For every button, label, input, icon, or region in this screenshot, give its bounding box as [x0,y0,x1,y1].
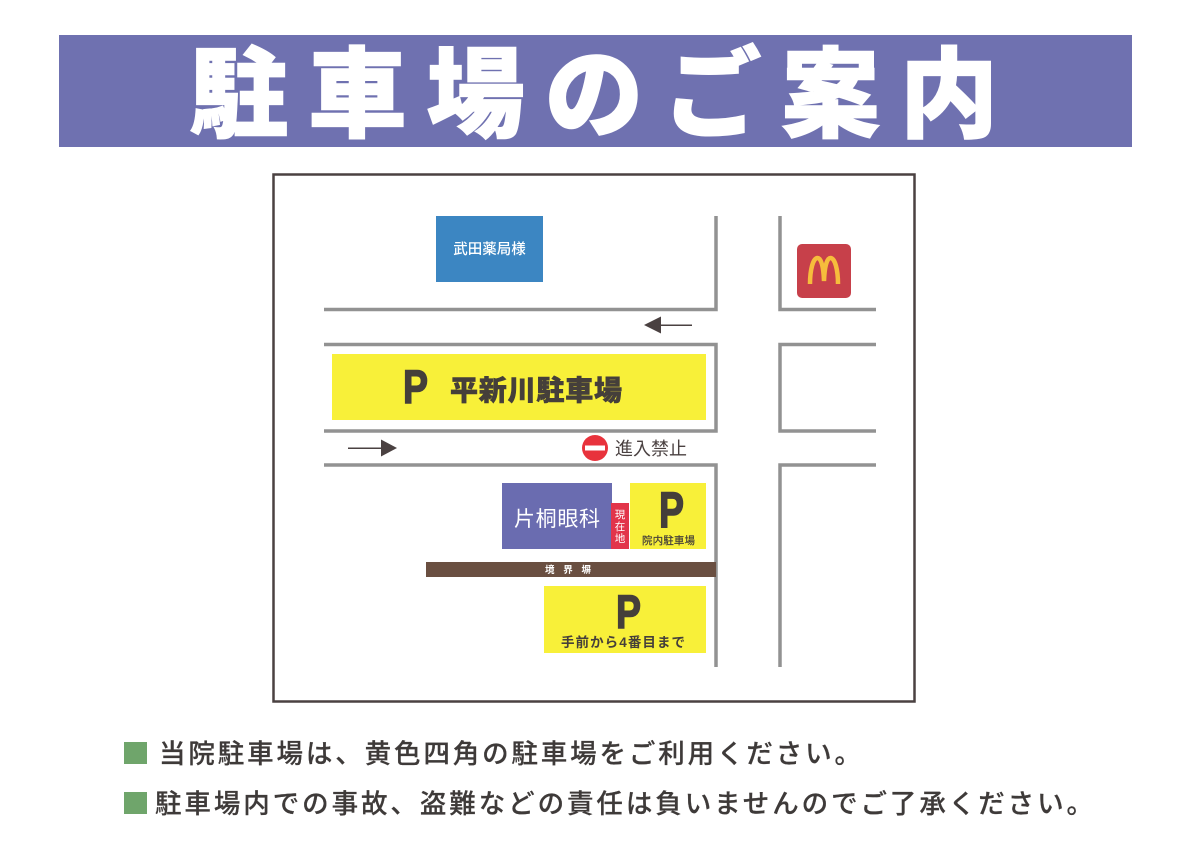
no entry label: 進入禁止 [615,439,687,459]
parking: clinic lot [630,482,706,549]
parking: front four spaces [544,585,706,653]
current location marker: 在 [615,521,625,533]
title banner: 駐車場のご案内 [190,40,998,150]
clinic building: 片桐眼科 [514,508,600,531]
parking: Heishinkawa: 平新川駐車場 [450,375,622,406]
pharmacy building: 武田薬局様 [453,241,526,258]
parking: front four spaces: P [616,585,641,638]
current location marker: 地 [615,532,626,545]
arrow: westbound [644,316,692,334]
icon: McDonald's logo [797,244,851,298]
note 2: 駐車場内での事故、盗難などの責任は負いませんのでご了承ください。 [155,789,1093,819]
roads [324,216,876,667]
arrow: eastbound [348,440,397,456]
boundary fence: 境界塀 [545,564,591,576]
boundary fence [426,562,716,577]
clinic building [502,483,612,549]
parking: clinic lot: 院内駐車場 [642,534,696,547]
current location marker [611,503,629,549]
parking: Heishinkawa: P [403,360,428,413]
note 1: 当院駐車場は、黄色四角の駐車場をご利用ください。 [159,739,861,769]
icon: no entry sign [582,435,608,461]
parking: clinic lot: P [659,482,684,538]
parking: Heishinkawa [332,354,706,420]
pharmacy building [436,216,543,282]
parking: front four spaces: 手前から4番目まで [561,634,685,650]
map panel [274,174,914,702]
current location marker: 現 [615,509,626,521]
